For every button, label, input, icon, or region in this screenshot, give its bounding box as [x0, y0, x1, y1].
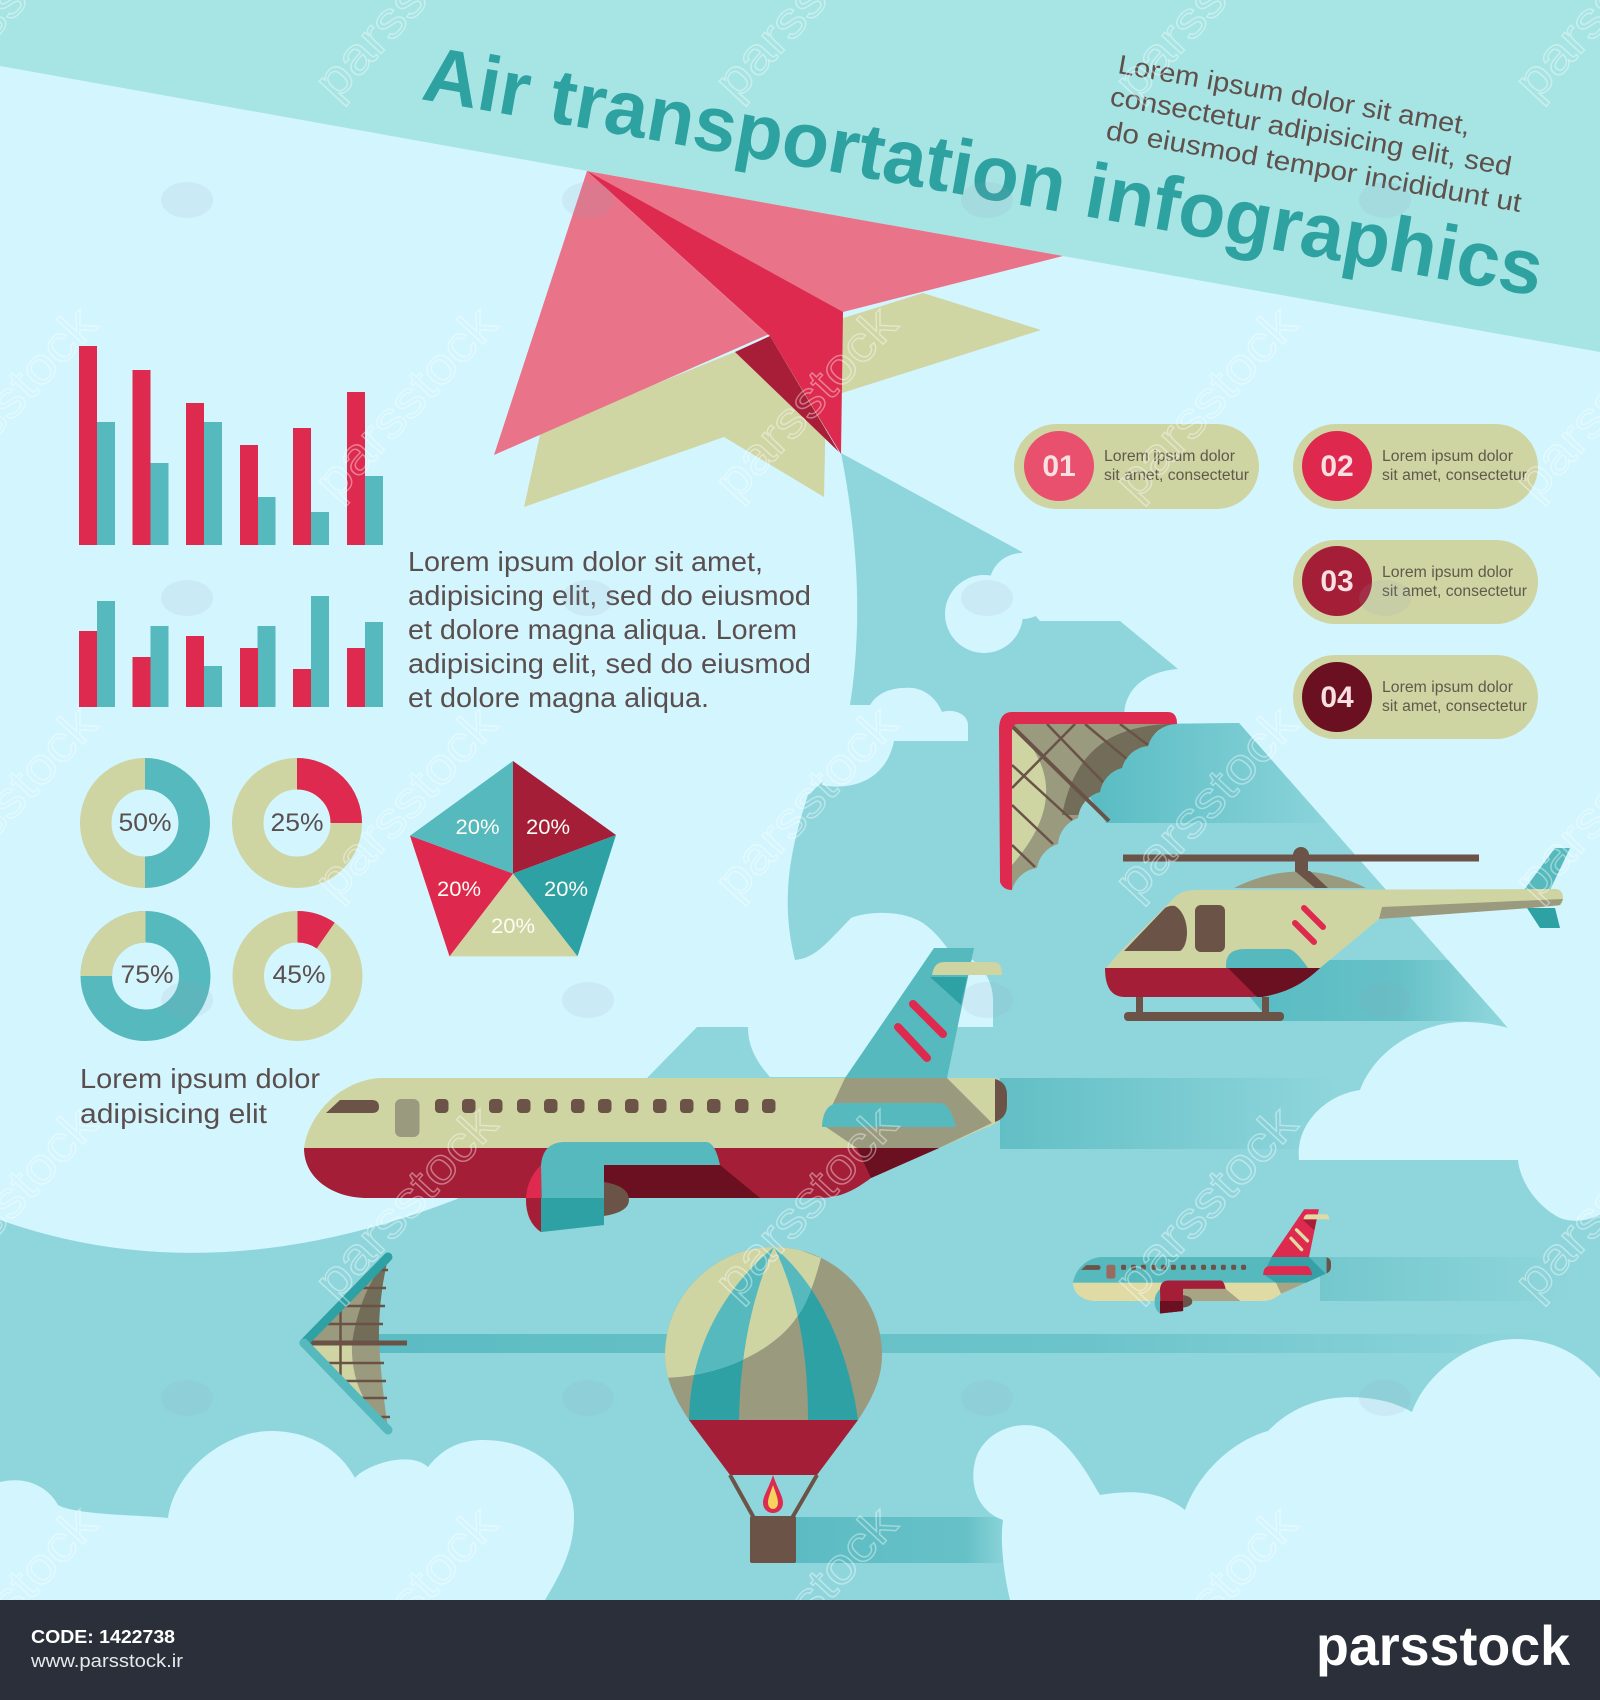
- pill 03: 03: [1320, 565, 1354, 598]
- footer url: www.parsstock.ir: [30, 1651, 183, 1671]
- donut chart: 45%: [248, 927, 347, 1025]
- pill 01: 01: [1042, 450, 1076, 483]
- donut chart: 50%: 50%: [118, 809, 172, 837]
- footer logo: parsstock: [1316, 1614, 1571, 1677]
- footer bar: [0, 1600, 1600, 1700]
- middle text block: Lorem ipsum dolor sit amet,: [408, 546, 763, 577]
- clouds: [0, 553, 1600, 1600]
- pill 03: Lorem ipsum dolor: [1382, 564, 1513, 581]
- icon: small airplane: [1073, 1209, 1331, 1314]
- icon: paper plane: [494, 171, 1063, 507]
- donut chart: 25%: [248, 774, 346, 872]
- donut chart: 75%: [96, 927, 195, 1025]
- watermarks: parsstock: [1103, 695, 1308, 910]
- middle text block: adipisicing elit, sed do eiusmod: [408, 648, 811, 679]
- watermarks: parsstock: [703, 295, 908, 510]
- pentagon chart: 20%: [491, 915, 535, 938]
- icon: hang glider top: [999, 712, 1177, 890]
- donut caption: Lorem ipsum dolor: [80, 1063, 320, 1094]
- pill 02: 02: [1320, 450, 1354, 483]
- watermark icons: [161, 182, 1411, 1416]
- pentagon chart: 20%: [456, 816, 500, 839]
- icon: main airplane: [304, 948, 1007, 1232]
- pill 02: [1293, 424, 1538, 509]
- pill 04: sit amet, consectetur: [1382, 698, 1527, 715]
- pill 03: sit amet, consectetur: [1382, 583, 1527, 600]
- pill 04: [1293, 655, 1538, 739]
- icon: helicopter: [1105, 847, 1570, 1021]
- donut chart: 75%: 75%: [120, 961, 174, 989]
- watermarks: parsstock: [303, 295, 508, 510]
- sky shape: [0, 453, 1600, 1600]
- title: Air transportation infographics: [417, 29, 1550, 313]
- pill 03: [1293, 540, 1538, 624]
- watermarks: parsstock: [703, 1095, 908, 1310]
- top right text block: do eiusmod tempor incididunt ut: [1104, 115, 1524, 218]
- donut chart: 45%: 45%: [272, 961, 326, 989]
- pill 02: sit amet, consectetur: [1382, 467, 1527, 484]
- bar chart: top: [79, 346, 383, 545]
- donut caption: [80, 1063, 320, 1129]
- pentagon chart: 20%: [544, 878, 588, 901]
- pill 04: 04: [1320, 681, 1354, 714]
- donut chart: 50%: [96, 774, 194, 872]
- middle text block: et dolore magna aliqua. Lorem: [408, 614, 797, 645]
- top diagonal band: [0, 0, 1600, 352]
- pentagon chart: 20%: [526, 816, 570, 839]
- top right text block: consectetur adipisicing elit, sed: [1108, 81, 1514, 182]
- middle text block: [408, 546, 811, 713]
- middle text block: et dolore magna aliqua.: [408, 682, 709, 713]
- pill 04: Lorem ipsum dolor: [1382, 679, 1513, 696]
- bar chart: bottom: [79, 596, 383, 707]
- icon: hang glider lower: [304, 1257, 407, 1430]
- watermarks: parsstock: [303, 1095, 508, 1310]
- pill 02: Lorem ipsum dolor: [1382, 448, 1513, 465]
- watermarks: parsstock: [1103, 1095, 1308, 1310]
- pentagon chart: [410, 761, 616, 956]
- pill 01: sit amet, consectetur: [1104, 467, 1249, 484]
- watermarks: parsstock: [1103, 295, 1308, 510]
- pill 01: Lorem ipsum dolor: [1104, 448, 1235, 465]
- top right text block: Lorem ipsum dolor sit amet,: [1116, 49, 1473, 141]
- watermarks: parsstock: [303, 695, 508, 910]
- pill 01: [1014, 424, 1259, 509]
- icon: hot air balloon: [665, 1247, 882, 1563]
- pentagon chart: 20%: [437, 878, 481, 901]
- donut caption: adipisicing elit: [80, 1098, 267, 1129]
- watermarks: parsstock: [703, 695, 908, 910]
- middle text block: adipisicing elit, sed do eiusmod: [408, 580, 811, 611]
- footer code: CODE: 1422738: [31, 1627, 175, 1647]
- donut chart: 25%: 25%: [270, 809, 324, 837]
- top right text block: [1104, 49, 1524, 218]
- flight trails: [379, 723, 1580, 1563]
